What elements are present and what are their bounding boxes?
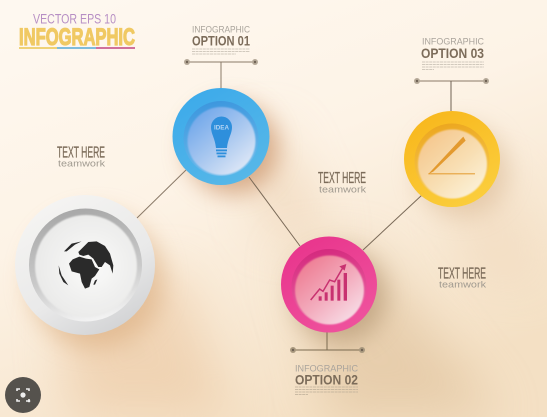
text here: right [438,266,486,290]
option 01 label [192,24,250,54]
icon: camera search badge [5,377,41,413]
title block [19,12,135,51]
option 01 label: INFOGRAPHIC [192,24,250,36]
connector: blue circle to pink circle [249,177,300,246]
connector: pink circle to yellow circle [363,195,422,250]
text here: centre: teamwork [319,184,366,196]
icon: growth chart [311,264,347,301]
yellow pencil circle [404,111,500,207]
option 01 label: OPTION 01 [192,32,250,48]
option 02 connector [290,332,365,353]
pink chart circle [281,236,377,332]
title block: VECTOR EPS 10 [33,12,116,26]
title block: INFOGRAPHIC [19,24,135,51]
text here: centre [318,170,366,196]
text here: centre: TEXT HERE [318,170,366,187]
icon: globe [59,241,113,289]
option 03 label: OPTION 03 [421,45,484,61]
icon: light bulb: IDEA [214,126,230,132]
option 02 label [295,364,358,394]
text here: right: teamwork [439,280,486,290]
option 02 label: OPTION 02 [295,372,358,388]
option 01 connector [184,59,258,89]
connector: globe to blue circle [137,170,186,218]
option 03 connector [414,78,489,111]
blue idea circle [172,88,270,185]
icon: pencil line [428,137,475,174]
white globe circle [15,195,155,335]
text here: left [57,144,105,170]
option 03 label: INFOGRAPHIC [422,36,484,48]
text here: left: TEXT HERE [57,144,105,162]
option 03 label [421,36,484,70]
text here: left: teamwork [58,158,105,170]
text here: right: TEXT HERE [438,266,486,282]
background shadows [28,102,547,417]
option 02 label: INFOGRAPHIC [295,364,358,374]
